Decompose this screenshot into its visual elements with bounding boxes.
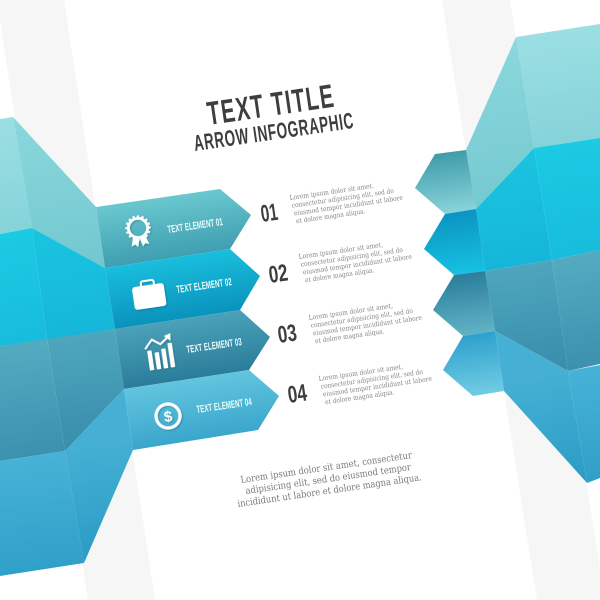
text block 3	[308, 298, 424, 346]
arrow label 4: TEXT ELEMENT 04	[196, 395, 253, 415]
number 02: 02	[267, 259, 290, 289]
bottom text block	[237, 450, 422, 510]
number 01: 01	[259, 199, 280, 228]
bottom text block: adipisicing elit, sed do eiusmod tempor	[245, 462, 412, 497]
icon: bar chart with trend arrow	[143, 333, 175, 371]
text block 3: et dolore magna aliqua.	[315, 327, 385, 345]
text block 2: Lorem ipsum dolor sit amet,	[298, 241, 383, 261]
arrow label 3: TEXT ELEMENT 03	[186, 335, 243, 355]
text block 2: eiusmod tempor incididunt ut labore	[302, 253, 412, 277]
arrow label 1: TEXT ELEMENT 01	[167, 215, 224, 235]
arrow 4	[124, 370, 279, 450]
arrow label 2: TEXT ELEMENT 02	[176, 275, 233, 295]
text block 2: et dolore magna aliqua.	[305, 266, 375, 284]
bottom text block: Lorem ipsum dolor sit amet, consectetur	[240, 450, 413, 486]
text block 1: eiusmod tempor incididunt ut labore	[293, 194, 403, 218]
icon: dollar coin: $	[163, 408, 174, 426]
panel: left folded block	[0, 117, 133, 576]
text block 2: consectetur adipisicing elit, sed do	[300, 246, 403, 269]
number 04: 04	[286, 379, 309, 409]
arrow 2	[105, 249, 260, 329]
arrow 1	[96, 189, 251, 268]
background band: right	[442, 0, 600, 600]
text block 1: Lorem ipsum dolor sit amet,	[289, 182, 374, 202]
icon: briefcase	[131, 278, 167, 310]
right arrow tabs	[415, 150, 504, 396]
text block 4: et dolore magna aliqua.	[325, 388, 395, 406]
title: TEXT TITLE	[205, 77, 336, 132]
number 03: 03	[276, 319, 299, 349]
text block 3: Lorem ipsum dolor sit amet,	[308, 302, 393, 322]
text block 3: consectetur adipisicing elit, sed do	[310, 307, 413, 330]
text block 3: eiusmod tempor incididunt ut labore	[312, 314, 422, 338]
subtitle: ARROW INFOGRAPHIC	[192, 107, 355, 156]
text block 2	[298, 237, 414, 285]
text block 1: consectetur adipisicing elit, sed do	[291, 187, 394, 210]
background band: left	[0, 0, 155, 600]
text block 1: et dolore magna aliqua.	[296, 207, 366, 225]
arrow 3	[115, 310, 270, 389]
text block 1	[289, 178, 405, 226]
text block 4: Lorem ipsum dolor sit amet,	[318, 363, 403, 383]
panel: right folded block	[466, 24, 600, 483]
text block 4: consectetur adipisicing elit, sed do	[320, 368, 423, 391]
bottom text block: incididunt ut labore et dolore magna aliqua.	[237, 472, 422, 510]
icon: award ribbon	[125, 215, 152, 249]
icon: dollar coin	[154, 402, 182, 430]
text block 4: eiusmod tempor incididunt ut labore	[322, 375, 432, 399]
text block 4	[318, 359, 434, 407]
